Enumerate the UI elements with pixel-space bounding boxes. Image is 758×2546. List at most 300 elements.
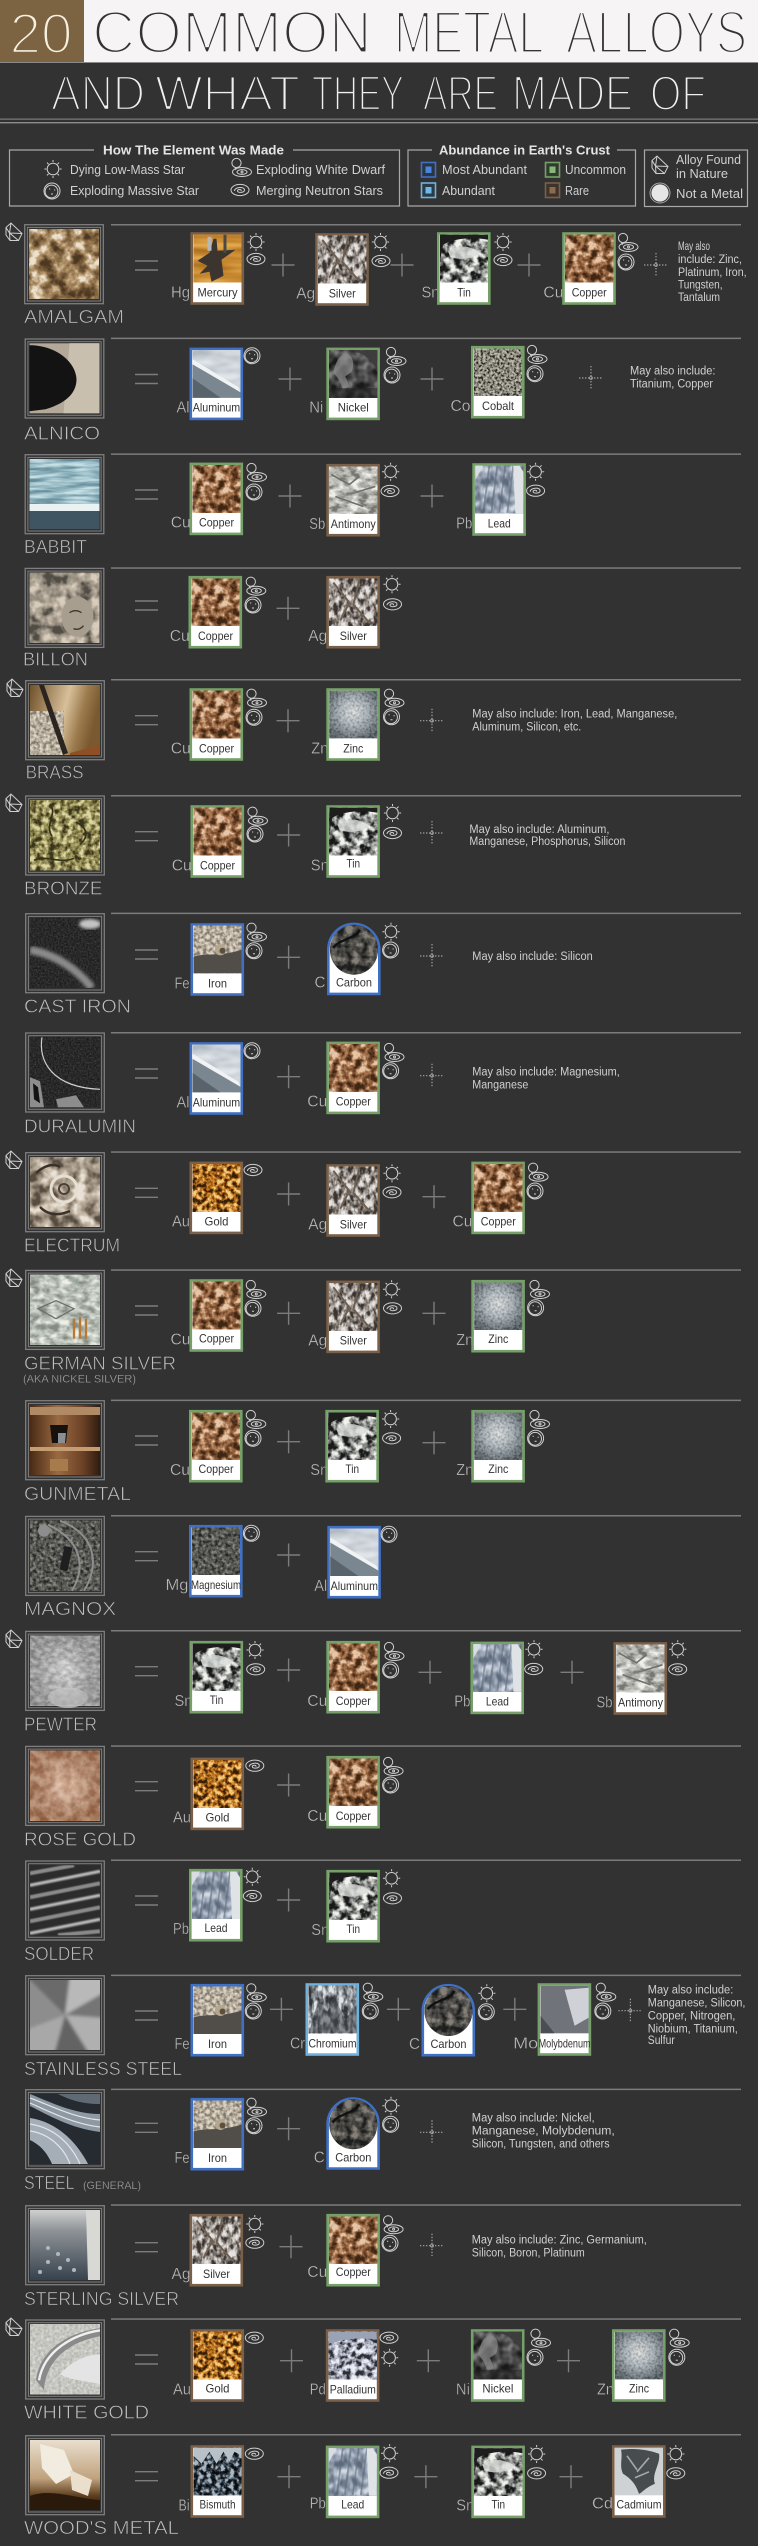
dotted plus	[420, 944, 444, 968]
legend: abundance in earth's crust: Most Abundant	[442, 162, 527, 177]
alloy name	[23, 1352, 176, 1386]
card: antimony	[596, 1640, 687, 1714]
card: iron: Iron	[208, 2037, 227, 2051]
card: copper: Cu	[172, 857, 192, 874]
may also include note: May also include:	[648, 1984, 733, 1996]
equals	[135, 2355, 158, 2364]
may also include note	[678, 241, 747, 304]
card: silver	[296, 233, 390, 304]
card: copper: Cu	[171, 740, 191, 757]
card: nickel: Nickel	[482, 2381, 513, 2395]
equals	[135, 2011, 158, 2020]
title line two: OF	[650, 67, 706, 121]
card: antimony: Antimony	[331, 517, 376, 531]
alloy image: billon	[25, 568, 104, 647]
card: copper: Copper	[336, 1809, 371, 1823]
card: zinc	[456, 1410, 550, 1481]
alloy image: wood's metal	[26, 2436, 104, 2515]
row: white gold	[6, 2318, 741, 2422]
row: sterling silver	[24, 2204, 741, 2309]
card: copper	[170, 1410, 266, 1481]
legend: alloy found in nature / not a metal: in Nature	[676, 166, 728, 181]
card: tin: Sn	[311, 1922, 329, 1939]
alloy name: MAGNOX	[24, 1598, 117, 1619]
card: copper: Copper	[572, 285, 607, 299]
card: gold: Au	[172, 1214, 190, 1231]
title line two: THEY	[312, 67, 404, 121]
equals	[135, 601, 158, 610]
card: cobalt: Cobalt	[482, 399, 515, 413]
card: lead	[173, 1868, 261, 1940]
may also include note: Niobium, Titanium,	[648, 2023, 738, 2035]
card: silver: Silver	[340, 1217, 367, 1231]
card: copper	[452, 1163, 548, 1233]
card: copper: Cu	[452, 1214, 472, 1231]
card: tin: Tin	[346, 1462, 359, 1476]
card: carbon: Carbon	[335, 2150, 371, 2164]
may also include note: Manganese, Molybdenum,	[472, 2126, 615, 2138]
legend: alloy found in nature / not a metal	[644, 150, 748, 206]
card: carbon	[409, 1984, 495, 2055]
card: bismuth: Bismuth	[200, 2497, 236, 2511]
alloy image: pewter	[26, 1631, 104, 1710]
card: silver: Ag	[308, 1333, 327, 1350]
plus	[277, 2117, 300, 2140]
card: antimony: Antimony	[618, 1695, 663, 1709]
card: chromium: Cr	[290, 2035, 305, 2052]
card: cobalt: Co	[450, 398, 470, 415]
card: copper: Cu	[170, 1462, 190, 1479]
card: molybdenum	[513, 1983, 616, 2054]
may also include note: Manganese	[472, 1080, 528, 1092]
equals	[135, 832, 158, 841]
card: mercury: Hg	[171, 284, 190, 301]
card: tin: Tin	[347, 856, 360, 870]
card: copper	[307, 2215, 403, 2285]
alloy name: STEEL	[24, 2172, 74, 2193]
card: iron: Iron	[208, 2151, 227, 2165]
card: antimony: Sb	[596, 1694, 612, 1711]
alloy image: bronze	[26, 796, 104, 875]
card: copper: Copper	[199, 1331, 234, 1345]
card: nickel	[456, 2329, 550, 2400]
legend: how the element was made: Exploding Massive Star	[70, 183, 200, 198]
card: iron: Iron	[208, 976, 227, 990]
card: gold	[173, 1759, 264, 1829]
row: steel	[24, 2089, 741, 2193]
card: silver: Ag	[308, 1216, 327, 1233]
may also include note: May also include: Nickel,	[472, 2113, 595, 2125]
card: copper: Cu	[307, 1094, 327, 1111]
may also include note: May also include: Aluminum,	[469, 824, 609, 836]
row: wood's metal	[24, 2434, 741, 2538]
card: copper	[307, 1757, 403, 1827]
card: tin: Sn	[310, 1462, 328, 1479]
card: aluminum: Aluminum	[331, 1579, 378, 1593]
equals	[135, 1436, 158, 1445]
legend: how the element was made	[10, 142, 400, 206]
card: tin: Tin	[492, 2498, 505, 2512]
row: duralumin	[24, 1032, 741, 1136]
may also include note: May also include: Iron, Lead, Manganese,	[472, 708, 677, 720]
card: aluminum	[176, 1043, 260, 1114]
card: iron: Fe	[174, 2150, 190, 2167]
card: zinc: Zn	[597, 2381, 614, 2398]
card: gold: Gold	[206, 1811, 230, 1825]
alloy name: GUNMETAL	[24, 1483, 131, 1504]
card: zinc: Zn	[456, 1332, 473, 1349]
card: aluminum: Aluminum	[193, 401, 240, 415]
card: aluminum	[176, 348, 260, 419]
equals	[135, 2123, 158, 2132]
alloy name	[24, 2172, 141, 2193]
equals	[135, 1188, 158, 1197]
card: molybdenum: Molybdenum	[539, 2036, 591, 2050]
may also include note: Sulfur	[648, 2035, 675, 2047]
alloy name: BRASS	[26, 761, 84, 782]
plus	[417, 2349, 440, 2372]
plus	[420, 368, 444, 390]
may also include note: May also include: Zinc, Germanium,	[472, 2234, 647, 2246]
card: lead: Pb	[173, 1921, 189, 1938]
alloy image: rose gold	[26, 1746, 104, 1825]
card: lead: Lead	[486, 1695, 509, 1709]
card: copper	[307, 1043, 404, 1113]
card: lead: Pb	[456, 515, 472, 532]
header band	[0, 0, 758, 66]
card: tin	[422, 233, 512, 304]
legend: alloy found in nature / not a metal: Alloy Found	[676, 152, 741, 167]
may also include note: May also include: Silicon	[472, 951, 593, 963]
may also include note: Platinum, Iron,	[678, 267, 747, 279]
icon: found in nature	[6, 2318, 22, 2336]
equals	[135, 716, 158, 725]
card: copper: Copper	[198, 629, 233, 643]
card: zinc	[597, 2329, 689, 2400]
card: tin: Sn	[311, 857, 329, 874]
may also include note: May also include:	[630, 365, 716, 377]
plus	[280, 2235, 302, 2258]
card: copper: Cu	[307, 1808, 327, 1825]
card: silver: Ag	[172, 2266, 190, 2283]
dotted plus	[420, 821, 444, 845]
plus	[272, 254, 294, 276]
title line two: AND	[51, 67, 145, 121]
card: mercury: Mercury	[198, 285, 238, 299]
alloy name: SOLDER	[24, 1943, 94, 1964]
card: silver: Silver	[203, 2267, 230, 2281]
card: aluminum: Al	[176, 1094, 190, 1111]
plus	[414, 2465, 437, 2488]
plus	[278, 2465, 300, 2488]
may also include note: Silicon, Boron, Platinum	[472, 2247, 585, 2259]
icon: found in nature	[6, 1151, 22, 1168]
card: lead: Pb	[310, 2496, 326, 2513]
alloy name: BRONZE	[24, 877, 102, 898]
card: copper	[307, 1642, 404, 1712]
card: gold: Au	[173, 2381, 191, 2398]
plus	[280, 2349, 303, 2372]
alloy image: sterling silver	[26, 2206, 104, 2285]
plus	[390, 254, 414, 276]
alloy image: cast iron	[26, 914, 104, 993]
card: tin: Tin	[457, 285, 471, 299]
may also include note: May also	[678, 241, 710, 253]
legend: how the element was made: Merging Neutron Stars	[256, 183, 383, 198]
legend: abundance in earth's crust: Abundance in Earth's Crust	[439, 142, 611, 158]
card: copper: Copper	[200, 858, 235, 872]
card: copper	[170, 577, 266, 647]
plus	[277, 1888, 300, 1912]
card: tin: Sn	[174, 1693, 192, 1710]
plus	[277, 824, 300, 846]
card: zinc: Zn	[311, 740, 328, 757]
card: palladium: Palladium	[330, 2382, 376, 2396]
card: carbon: C	[314, 975, 326, 992]
row: rose gold	[24, 1745, 741, 1850]
title line two: ARE	[423, 67, 498, 121]
card: copper	[172, 806, 268, 876]
card: zinc: Zinc	[343, 741, 363, 755]
dotted plus	[618, 1999, 642, 2023]
may also include note: Tungsten,	[678, 280, 722, 292]
card: lead	[310, 2444, 398, 2517]
alloy name: CAST IRON	[24, 996, 131, 1017]
alloy name: WOOD'S METAL	[24, 2517, 179, 2538]
card: aluminum: Aluminum	[193, 1095, 240, 1109]
title line two: MADE	[512, 67, 633, 121]
may also include note: Silicon, Tungsten, and others	[472, 2138, 610, 2150]
card: aluminum	[314, 1526, 397, 1597]
card: lead: Pb	[454, 1694, 470, 1711]
legend: abundance in earth's crust	[408, 142, 636, 206]
card: nickel: Ni	[456, 2381, 470, 2398]
equals	[135, 490, 158, 499]
plus	[560, 1661, 584, 1684]
may also include note: include: Zinc,	[678, 254, 742, 266]
card: copper	[171, 689, 266, 760]
card: gold: Au	[173, 1810, 191, 1827]
plus	[277, 1182, 300, 1206]
plus	[276, 597, 300, 620]
card: tin: Tin	[210, 1693, 223, 1707]
card: silver	[308, 1280, 402, 1352]
may also include note: Aluminum, Silicon, etc.	[472, 721, 581, 733]
card: aluminum: Al	[314, 1578, 327, 1595]
legend: abundance in earth's crust: Abundant	[442, 183, 495, 198]
legend: abundance in earth's crust: Rare	[565, 183, 589, 198]
alloy image: solder	[26, 1861, 104, 1940]
card: copper: Copper	[199, 741, 234, 755]
card: silver: Silver	[340, 1334, 367, 1348]
row: electrum	[6, 1151, 741, 1256]
legend: abundance in earth's crust: Uncommon	[565, 162, 626, 177]
may also include note: Tantalum	[678, 292, 720, 304]
alloy name: STERLING SILVER	[24, 2288, 179, 2309]
legend: alloy found in nature / not a metal: Not a Metal	[676, 186, 743, 201]
card: silver	[308, 1164, 401, 1236]
may also include note: Copper, Nitrogen,	[648, 2010, 735, 2022]
legend: how the element was made: How The Element Was Made	[103, 142, 284, 158]
may also include note: Titanium, Copper	[630, 378, 713, 390]
title number: 20	[10, 2, 72, 66]
equals	[135, 1782, 158, 1791]
dotted plus	[420, 2120, 444, 2144]
may also include note: Manganese, Phosphorus, Silicon	[469, 836, 625, 848]
plus	[277, 1302, 300, 1325]
card: carbon	[314, 2097, 400, 2168]
card: zinc: Zinc	[488, 1332, 508, 1346]
card: lead	[456, 463, 545, 534]
plus	[422, 1431, 446, 1454]
alloy image: electrum	[26, 1153, 104, 1232]
card: lead	[454, 1640, 543, 1713]
alloy image: duralumin	[26, 1033, 104, 1112]
dotted plus	[420, 2234, 444, 2258]
card: carbon: Carbon	[430, 2037, 466, 2051]
card: iron	[174, 1984, 266, 2055]
alloy name: (GENERAL)	[83, 2180, 141, 2192]
card: copper: Cu	[170, 628, 190, 645]
row: bronze	[6, 794, 741, 898]
plus	[518, 254, 540, 276]
dotted plus	[420, 1064, 444, 1088]
plus	[277, 946, 300, 969]
row: pewter	[6, 1630, 741, 1735]
alloy name: DURALUMIN	[24, 1115, 136, 1136]
card: copper: Copper	[198, 1462, 234, 1476]
alloy image: alnico	[25, 339, 104, 418]
card: antimony: Sb	[309, 516, 325, 533]
icon: found in nature	[6, 1269, 22, 1286]
plus	[277, 1544, 300, 1566]
card: copper	[170, 1280, 266, 1350]
legend: how the element was made: Exploding White Dwarf	[256, 162, 385, 177]
card: cadmium: Cadmium	[616, 2497, 662, 2511]
icon: found in nature	[6, 223, 22, 240]
alloy name: ALNICO	[24, 422, 100, 444]
may also include note	[469, 824, 625, 848]
plus	[557, 2349, 580, 2372]
card: lead: Lead	[488, 516, 511, 530]
card: copper: Copper	[336, 2265, 371, 2279]
row: cast iron	[24, 913, 741, 1017]
card: tin: Sn	[422, 284, 440, 301]
alloy image: brass	[26, 681, 104, 760]
plus	[420, 484, 444, 508]
may also include note	[630, 365, 716, 390]
card: copper	[543, 233, 638, 304]
plus	[422, 1185, 446, 1208]
may also include note	[472, 1067, 620, 1092]
card: silver: Ag	[296, 285, 315, 302]
row: brass	[7, 679, 741, 782]
may also include note	[472, 2234, 647, 2259]
card: magnesium: Magnesium	[191, 1578, 241, 1592]
row: babbit	[24, 453, 741, 557]
card: cobalt	[450, 345, 547, 417]
dotted plus	[579, 366, 603, 390]
card: zinc: Zinc	[629, 2381, 649, 2395]
card: nickel: Nickel	[338, 401, 369, 415]
card: silver: Silver	[329, 286, 356, 300]
card: copper: Cu	[307, 2264, 327, 2281]
card: zinc: Zinc	[488, 1462, 508, 1476]
equals	[135, 1069, 158, 1078]
may also include note	[472, 708, 677, 733]
plus	[422, 1302, 446, 1325]
legend: how the element was made: Dying Low-Mass Star	[70, 162, 186, 177]
alloy image: gunmetal	[26, 1401, 104, 1480]
card: tin	[456, 2445, 546, 2517]
may also include note: May also include: Magnesium,	[472, 1067, 620, 1079]
row: billon	[23, 567, 741, 670]
equals	[135, 1306, 158, 1315]
card: iron	[174, 923, 266, 994]
card: silver	[172, 2215, 264, 2285]
card: zinc	[456, 1280, 550, 1351]
row: german silver	[6, 1269, 741, 1386]
plus	[277, 1065, 300, 1088]
card: iron: Fe	[174, 975, 190, 992]
alloy name: ELECTRUM	[24, 1235, 120, 1256]
dotted plus	[420, 709, 444, 733]
plus	[270, 1998, 293, 2021]
plus	[277, 1430, 300, 1453]
card: antimony	[309, 463, 399, 535]
card: tin	[311, 804, 402, 876]
card: copper: Copper	[481, 1215, 516, 1229]
card: magnesium	[166, 1525, 259, 1596]
card: carbon: C	[409, 2036, 420, 2053]
title line one: METAL	[394, 0, 544, 66]
card: nickel: Ni	[309, 400, 323, 417]
card: gold: Gold	[204, 1215, 228, 1229]
alloy name: WHITE GOLD	[24, 2401, 149, 2422]
card: bismuth: Bi	[178, 2497, 190, 2514]
plus	[277, 1658, 300, 1682]
alloy name: BILLON	[23, 649, 88, 670]
card: iron: Fe	[174, 2036, 190, 2053]
icon: found in nature	[6, 1630, 22, 1648]
card: cadmium	[592, 2445, 685, 2516]
plus	[278, 368, 302, 390]
equals	[135, 950, 158, 959]
title line two	[51, 67, 706, 121]
card: silver: Silver	[340, 629, 367, 643]
card: magnesium: Mg	[166, 1577, 188, 1594]
equals	[135, 1896, 158, 1905]
card: carbon: C	[314, 2149, 325, 2166]
alloy image: babbit	[25, 455, 104, 534]
card: carbon: Carbon	[336, 976, 372, 990]
row: alnico	[24, 338, 741, 444]
card: tin: Sn	[456, 2498, 474, 2515]
plus	[503, 1998, 526, 2021]
card: nickel	[309, 347, 406, 419]
icon: found in nature	[6, 794, 22, 812]
card: tin	[174, 1641, 265, 1712]
equals	[135, 1552, 158, 1561]
card: gold: Gold	[206, 2381, 230, 2395]
plus	[387, 1998, 410, 2021]
card: zinc: Zn	[456, 1462, 473, 1479]
card: copper: Cu	[170, 1331, 190, 1348]
card: zinc	[311, 689, 404, 760]
equals	[135, 1667, 158, 1676]
equals	[135, 2472, 158, 2481]
row: gunmetal	[24, 1400, 741, 1504]
